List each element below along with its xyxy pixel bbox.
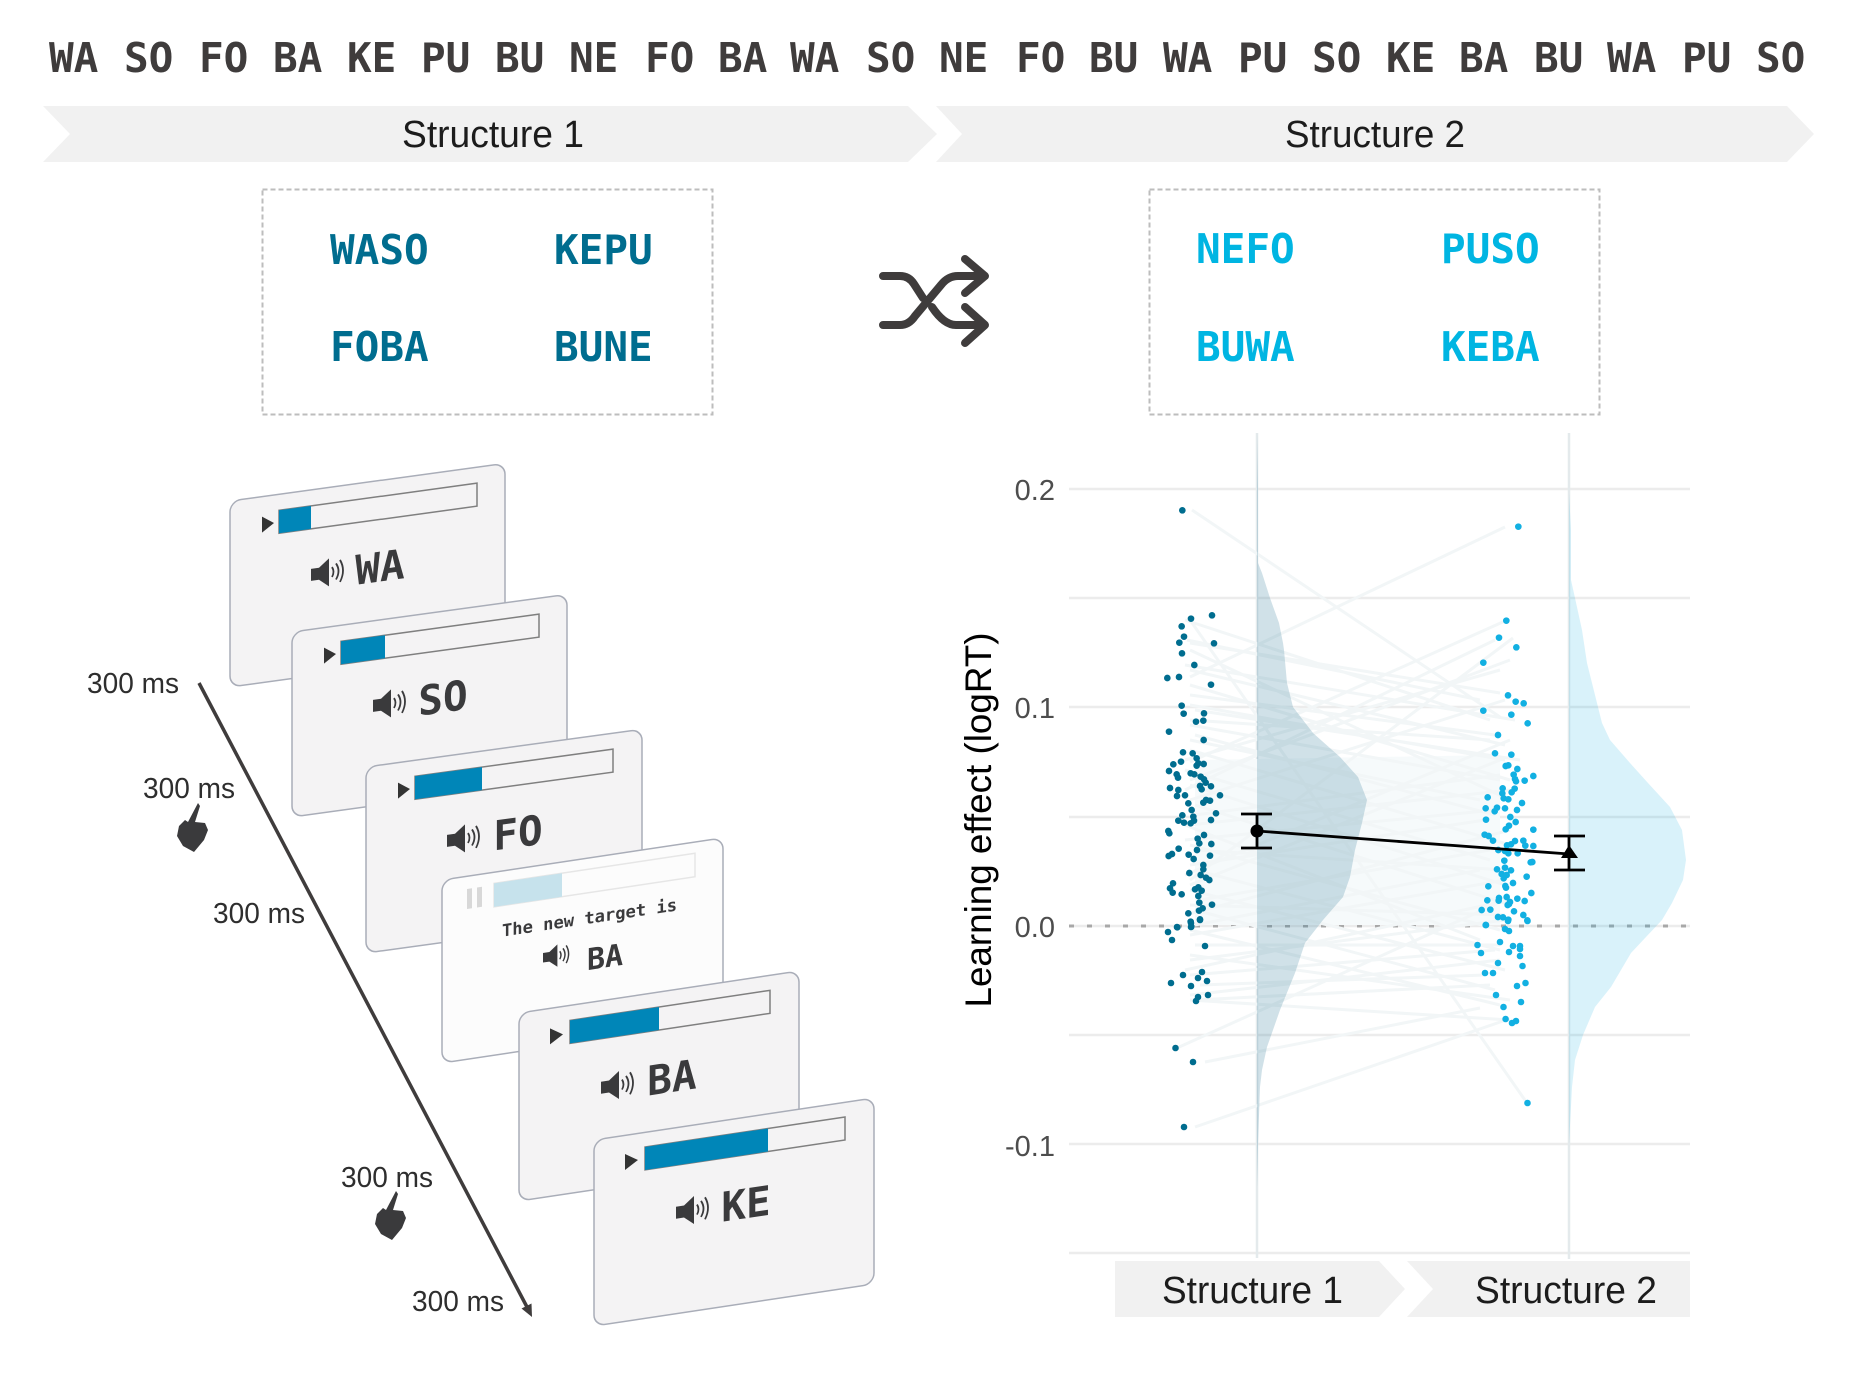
syllable stream: WA bbox=[49, 34, 99, 82]
syllable stream: PU bbox=[1682, 34, 1731, 82]
syllable stream: SO bbox=[866, 34, 915, 82]
card: KE: KE bbox=[721, 1177, 771, 1232]
syllable stream: WA bbox=[1163, 34, 1213, 82]
panel: Structure 2 words: KEBA bbox=[1441, 323, 1540, 371]
chevron: Structure 2 bbox=[936, 106, 1814, 162]
syllable stream: FO bbox=[1016, 34, 1065, 82]
x axis chevron: Structure 1: Structure 1 bbox=[1162, 1270, 1343, 1312]
violin: Structure 2 bbox=[1569, 493, 1686, 1144]
panel: Structure 1 words: FOBA bbox=[330, 323, 429, 371]
axis tick labels bbox=[1005, 475, 1055, 1163]
chart: raincloud plot of learning effect bbox=[958, 433, 1690, 1259]
axis tick labels: -0.1 bbox=[1005, 1131, 1055, 1163]
syllable stream: FO bbox=[199, 34, 248, 82]
syllable stream: PU bbox=[421, 34, 470, 82]
syllable stream: NE bbox=[939, 34, 988, 82]
label: 300 ms intervals: 300 ms bbox=[412, 1286, 504, 1318]
icon: pointing hand 1 bbox=[177, 803, 208, 852]
x axis chevron: Structure 2 bbox=[1407, 1261, 1690, 1317]
card: FO bbox=[366, 729, 642, 953]
card: new target BA: The new target is bbox=[502, 896, 677, 942]
arrow: time axis bbox=[199, 683, 532, 1317]
card: SO: SO bbox=[418, 671, 468, 726]
panel: Structure 1 words bbox=[262, 190, 712, 414]
syllable stream: KE bbox=[347, 34, 396, 82]
syllable stream: KE bbox=[1386, 34, 1435, 82]
card: BA: BA bbox=[647, 1051, 697, 1106]
icon: shuffle arrows bbox=[883, 259, 985, 343]
card: SO bbox=[292, 594, 567, 817]
axis tick labels: 0.0 bbox=[1015, 912, 1055, 944]
panel: Structure 2 words: BUWA bbox=[1196, 323, 1295, 371]
syllable stream: BU bbox=[495, 34, 544, 82]
axis tick labels: 0.1 bbox=[1015, 693, 1055, 725]
syllable stream bbox=[49, 34, 1805, 82]
icon: pointing hand 2 bbox=[375, 1191, 406, 1240]
dots: Structure 1 participants bbox=[1167, 510, 1220, 1127]
syllable stream: BU bbox=[1089, 34, 1138, 82]
panel: Structure 2 words: NEFO bbox=[1196, 225, 1295, 273]
card: WA bbox=[230, 463, 505, 687]
card: KE bbox=[594, 1098, 874, 1326]
card: new target BA: BA bbox=[587, 938, 623, 978]
paired participant lines bbox=[1177, 510, 1527, 1127]
syllable stream: SO bbox=[124, 34, 173, 82]
x axis chevron: Structure 1 bbox=[1115, 1261, 1405, 1317]
syllable stream: NE bbox=[569, 34, 618, 82]
label: 300 ms intervals bbox=[87, 668, 504, 1318]
label: 300 ms intervals: 300 ms bbox=[213, 898, 305, 930]
card: FO: FO bbox=[493, 806, 543, 861]
syllable stream: WA bbox=[790, 34, 840, 82]
y axis title: Learning effect (logRT) bbox=[958, 632, 999, 1008]
label: 300 ms intervals: 300 ms bbox=[87, 668, 179, 700]
syllable stream: BA bbox=[273, 34, 323, 82]
mean line and error bars bbox=[1241, 814, 1585, 870]
chart grid lines bbox=[1069, 433, 1690, 1259]
panel: Structure 1 words: BUNE bbox=[554, 323, 653, 371]
syllable stream: BA bbox=[1459, 34, 1509, 82]
panel: Structure 1 words: KEPU bbox=[554, 226, 653, 274]
card: new target BA bbox=[442, 838, 723, 1063]
syllable stream: FO bbox=[645, 34, 694, 82]
panel: Structure 2 words: PUSO bbox=[1441, 225, 1540, 273]
violin: Structure 1 bbox=[1257, 433, 1367, 1187]
chevron: Structure 1: Structure 1 bbox=[402, 114, 584, 156]
syllable stream: WA bbox=[1607, 34, 1657, 82]
chevron: Structure 1 bbox=[43, 106, 937, 162]
syllable stream: BA bbox=[718, 34, 768, 82]
axis tick labels: 0.2 bbox=[1015, 475, 1055, 507]
zero reference line bbox=[1069, 924, 1690, 928]
syllable stream: BU bbox=[1534, 34, 1583, 82]
syllable stream: SO bbox=[1312, 34, 1361, 82]
card: WA: WA bbox=[355, 540, 405, 595]
chevron: Structure 2: Structure 2 bbox=[1285, 114, 1465, 156]
panel: Structure 2 words bbox=[1150, 190, 1600, 414]
x axis chevron: Structure 2: Structure 2 bbox=[1475, 1270, 1657, 1312]
label: 300 ms intervals: 300 ms bbox=[143, 773, 235, 805]
dots: Structure 2 participants bbox=[1478, 527, 1533, 1103]
panel: Structure 1 words: WASO bbox=[330, 226, 429, 274]
card: BA bbox=[519, 971, 799, 1201]
syllable stream: SO bbox=[1756, 34, 1805, 82]
label: 300 ms intervals: 300 ms bbox=[341, 1162, 433, 1194]
syllable stream: PU bbox=[1238, 34, 1287, 82]
